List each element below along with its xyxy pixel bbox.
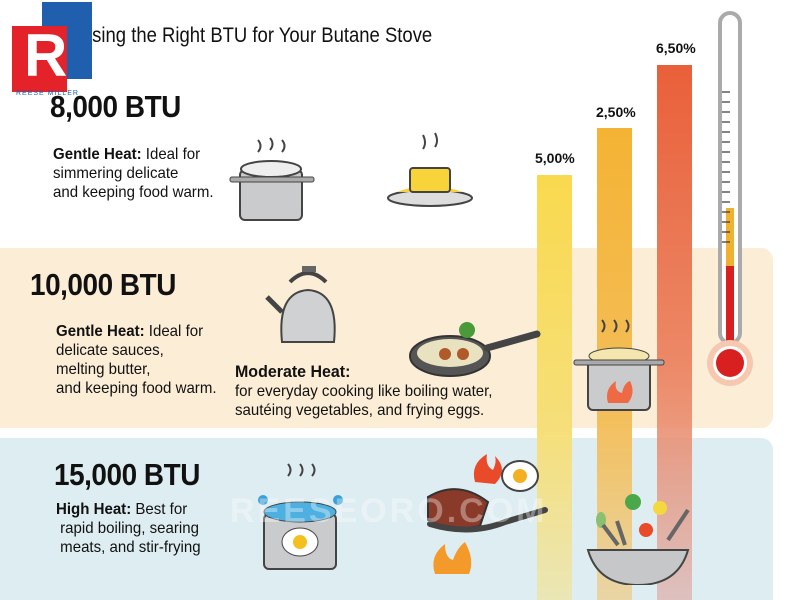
icon: frying pan xyxy=(409,322,540,377)
label 5,00%: 5,00% xyxy=(535,150,575,166)
text: moderate heat: for everyday cooking like boiling water, xyxy=(235,383,492,400)
label 6,50%: 6,50% xyxy=(656,40,696,56)
text: gentle heat 8000: Gentle Heat: Ideal for xyxy=(53,146,200,163)
icon: boiling pot xyxy=(574,319,664,411)
bar: 6,50% xyxy=(657,65,692,600)
text: gentle heat 8000: and keeping food warm. xyxy=(53,184,214,201)
panel: 15,000 BTU background xyxy=(0,438,773,600)
bar chart xyxy=(535,40,696,600)
icon: pot with egg xyxy=(258,463,343,570)
label 2,50%: 2,50% xyxy=(596,104,636,120)
logo xyxy=(12,2,92,97)
text: gentle heat 8000: simmering delicate xyxy=(53,165,178,182)
text: high heat: meats, and stir-frying xyxy=(60,539,201,556)
bar: 2,50% xyxy=(597,128,632,600)
watermark: REESEORO.COM xyxy=(230,492,547,530)
text: gentle heat 8000 xyxy=(53,146,214,201)
icon: simmering pot xyxy=(230,137,314,221)
text: gentle heat 10000: delicate sauces, xyxy=(56,342,164,359)
logo: REESE MILLER xyxy=(16,90,79,97)
heading: 15,000 BTU: 15,000 BTU xyxy=(54,457,200,492)
text: gentle heat 10000: Gentle Heat: Ideal for xyxy=(56,323,203,340)
icon: steak pan with flames xyxy=(427,454,548,574)
panel: 10,000 BTU background xyxy=(0,248,773,428)
bar: 5,00% xyxy=(537,175,572,600)
text: moderate heat: Moderate Heat: xyxy=(235,362,350,381)
icon: kettle xyxy=(265,266,336,343)
text: gentle heat 10000 xyxy=(56,323,217,397)
text: moderate heat: sautéing vegetables, and frying eggs. xyxy=(235,402,484,419)
logo: R xyxy=(24,22,67,89)
text: gentle heat 10000: and keeping food warm. xyxy=(56,380,217,397)
title: Choosing the Right BTU for Your Butane Stove xyxy=(48,24,432,47)
text: moderate heat xyxy=(235,362,492,419)
text: high heat xyxy=(56,501,201,556)
heading: 8,000 BTU: 8,000 BTU xyxy=(50,89,181,124)
text: high heat: rapid boiling, searing xyxy=(60,520,199,537)
icon: thermometer xyxy=(707,11,753,386)
icon: butter xyxy=(387,132,473,207)
text: high heat: High Heat: Best for xyxy=(56,501,187,518)
heading: 10,000 BTU: 10,000 BTU xyxy=(30,267,176,302)
icon: wok stir-fry xyxy=(586,494,690,585)
text: gentle heat 10000: melting butter, xyxy=(56,361,150,378)
